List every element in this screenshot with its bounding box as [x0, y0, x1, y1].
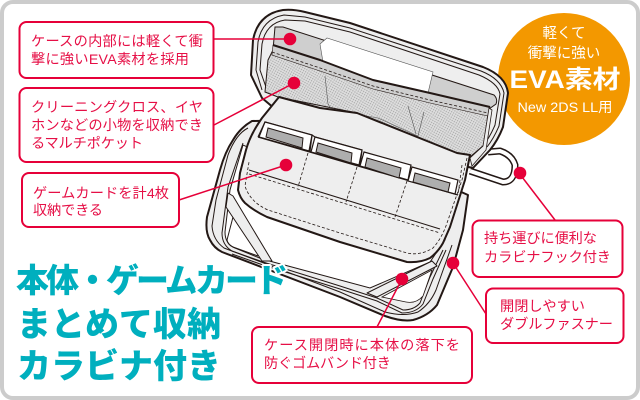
callout: multi pocket: ホンなどの小物を収納でき [31, 118, 203, 134]
case lid [251, 10, 508, 168]
carabiner hook [470, 151, 515, 182]
badge: EVA素材: 衝撃に強い [528, 45, 600, 62]
lid lining [273, 27, 497, 109]
rubber band [367, 261, 437, 297]
badge: EVA素材: 軽くて [542, 25, 586, 42]
badge: EVA素材: EVA素材 [510, 66, 620, 94]
left strap [226, 193, 272, 261]
title: 本体・ゲームカード [16, 262, 288, 299]
callout: multi pocket [20, 88, 214, 162]
right lower opening [382, 270, 432, 302]
card pocket flap [238, 97, 470, 262]
mesh pocket [265, 50, 488, 157]
title: カラビナ付き [17, 347, 221, 386]
callout: carabiner [472, 220, 622, 277]
callout: rubber band: ケース開閉時に本体の落下を [264, 338, 460, 354]
badge: EVA素材: New 2DS LL用 [518, 99, 612, 115]
callout: double zipper: 開閉しやすい [500, 299, 585, 315]
badge: EVA素材 [498, 13, 630, 145]
callout: EVA lining: 撃に強いEVA素材を採用 [31, 52, 189, 68]
callout: game cards: ゲームカードを計4枚 [33, 186, 169, 202]
case bottom shell [206, 120, 468, 320]
leader lines [179, 39, 555, 327]
white sheet [320, 38, 433, 93]
inner opening [225, 145, 445, 288]
title [16, 262, 288, 386]
title: まとめて収納 [17, 306, 221, 344]
illustration: open case [206, 10, 515, 320]
markers [280, 33, 526, 285]
callout: game cards [22, 173, 179, 227]
lid right gusset [470, 108, 492, 166]
callout: multi pocket: クリーニングクロス、イヤ [31, 100, 203, 116]
card slots [258, 122, 458, 195]
callout: rubber band [252, 327, 472, 383]
callout: carabiner: 持ち運びに便利な [484, 231, 597, 247]
left triangle line [227, 217, 258, 256]
callout: rubber band: 防ぐゴムバンド付き [264, 355, 391, 372]
callout: double zipper [486, 288, 624, 343]
callout: carabiner: カラビナフック付き [484, 250, 611, 266]
callout: game cards: 収納できる [33, 203, 103, 219]
callout: multi pocket: るマルチポケット [31, 136, 143, 152]
callout: double zipper: ダブルファスナー [500, 316, 613, 333]
inner rim lines [222, 143, 443, 310]
callout: EVA lining: ケースの内部には軽くて衝 [31, 34, 203, 50]
callout: EVA lining [20, 22, 214, 78]
